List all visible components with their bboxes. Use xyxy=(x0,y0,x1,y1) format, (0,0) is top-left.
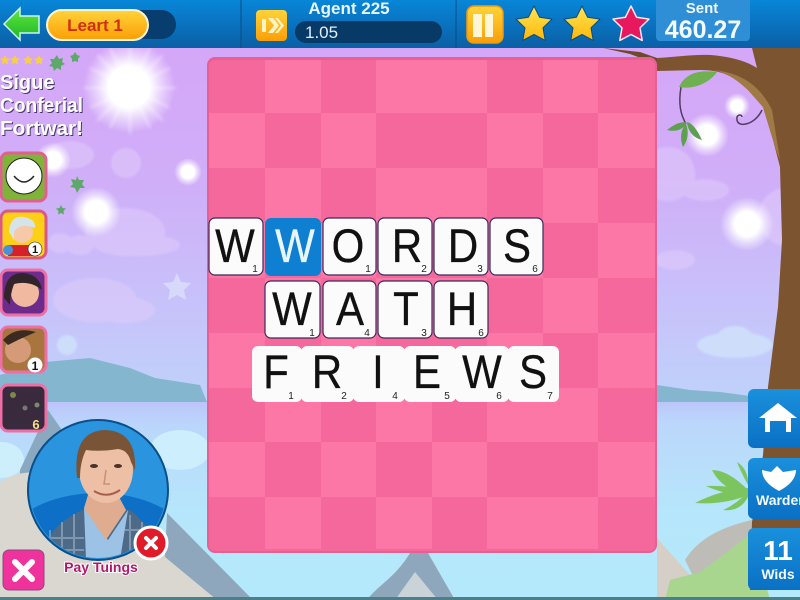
player name: Pay Tuings xyxy=(64,559,138,575)
tile row: FRIEWS: W xyxy=(462,346,502,399)
tree with branch and vines xyxy=(603,48,800,590)
clouds and distant scenery xyxy=(0,141,800,478)
icon: fast forward button xyxy=(256,10,287,41)
tile row: WWORDS: S xyxy=(503,220,531,273)
icon: gold star xyxy=(516,6,552,40)
tile row: WWORDS: 1 xyxy=(252,264,258,275)
foreground leaves on right xyxy=(695,462,748,510)
sent panel: Sent xyxy=(686,0,718,17)
agent score xyxy=(295,0,442,43)
tile row: WWORDS: W xyxy=(275,220,315,273)
tile row: WWORDS: D xyxy=(448,220,478,273)
player portrait xyxy=(27,419,169,561)
button: wilds counter xyxy=(748,528,800,590)
mini stars rating xyxy=(0,55,44,64)
tile row: FRIEWS: R xyxy=(312,346,342,399)
tile row: FRIEWS: 4 xyxy=(392,391,398,402)
button: warden xyxy=(748,458,800,519)
avatar: woman with headscarf: 1 xyxy=(32,244,38,256)
sun glows xyxy=(35,41,774,300)
button: wilds counter: 11 xyxy=(763,535,793,566)
tile row: WATH: H xyxy=(447,283,477,336)
icon: pink star xyxy=(613,6,649,40)
word board xyxy=(207,57,657,553)
tile row: FRIEWS: 6 xyxy=(496,391,502,402)
tile row: FRIEWS: E xyxy=(413,346,441,399)
sent panel xyxy=(656,0,750,44)
tile row: FRIEWS: 5 xyxy=(444,391,450,402)
promo text xyxy=(0,72,83,140)
tile row: FRIEWS: I xyxy=(372,346,384,399)
avatar: dark tile xyxy=(1,385,46,432)
tile row: WATH: 3 xyxy=(421,328,427,339)
promo text: Conferial xyxy=(0,95,83,117)
level pill xyxy=(47,10,176,40)
tile row: WATH: W xyxy=(272,283,312,336)
tile row: WATH: A xyxy=(336,283,364,336)
tile row: WWORDS: W xyxy=(215,220,255,273)
agent score: 1.05 xyxy=(305,23,338,42)
avatar: young man: 1 xyxy=(32,359,39,373)
tile row: WATH: 4 xyxy=(364,328,370,339)
tile row: FRIEWS: 1 xyxy=(288,391,294,402)
sent panel: 460.27 xyxy=(665,16,741,44)
tile row: WATH xyxy=(265,281,488,339)
tile row: FRIEWS: F xyxy=(263,346,289,399)
icon: red close badge xyxy=(135,527,167,559)
tile row: WWORDS: 3 xyxy=(477,264,483,275)
foreground mountains and grass xyxy=(0,410,800,600)
header bar xyxy=(0,0,800,48)
button: home xyxy=(748,389,800,448)
tile row: WATH: T xyxy=(393,283,419,336)
tile row: WWORDS: O xyxy=(332,220,364,273)
icon: pause button xyxy=(467,6,503,43)
tile row: WWORDS: 6 xyxy=(532,264,538,275)
tile row: FRIEWS: 7 xyxy=(547,391,553,402)
promo text: Fortwar! xyxy=(0,118,83,140)
tile row: WATH: 6 xyxy=(478,328,484,339)
promo text: Sigue xyxy=(0,72,54,94)
tile row: FRIEWS: 2 xyxy=(341,391,347,402)
avatar: woman xyxy=(1,270,46,315)
small leaves xyxy=(49,52,85,214)
avatar: young man xyxy=(1,327,46,373)
icon: pink close button xyxy=(3,550,44,590)
tile row: WWORDS xyxy=(209,218,543,276)
tile row: FRIEWS xyxy=(252,346,559,402)
avatar: woman with headscarf xyxy=(1,211,46,258)
level pill: Leart 1 xyxy=(67,16,123,35)
icon: gold star xyxy=(564,6,600,40)
avatar: cartoon character xyxy=(1,153,46,201)
tile row: FRIEWS: S xyxy=(519,346,547,399)
icon: back arrow xyxy=(4,8,39,40)
tile row: WWORDS: 2 xyxy=(421,264,427,275)
distant mountains xyxy=(0,358,750,402)
tile row: WATH: 1 xyxy=(309,328,315,339)
tile row: WWORDS: 1 xyxy=(365,264,371,275)
avatar: dark tile: 6 xyxy=(32,417,40,432)
button: wilds counter: Wids xyxy=(761,566,795,582)
tile row: WWORDS: R xyxy=(392,220,422,273)
